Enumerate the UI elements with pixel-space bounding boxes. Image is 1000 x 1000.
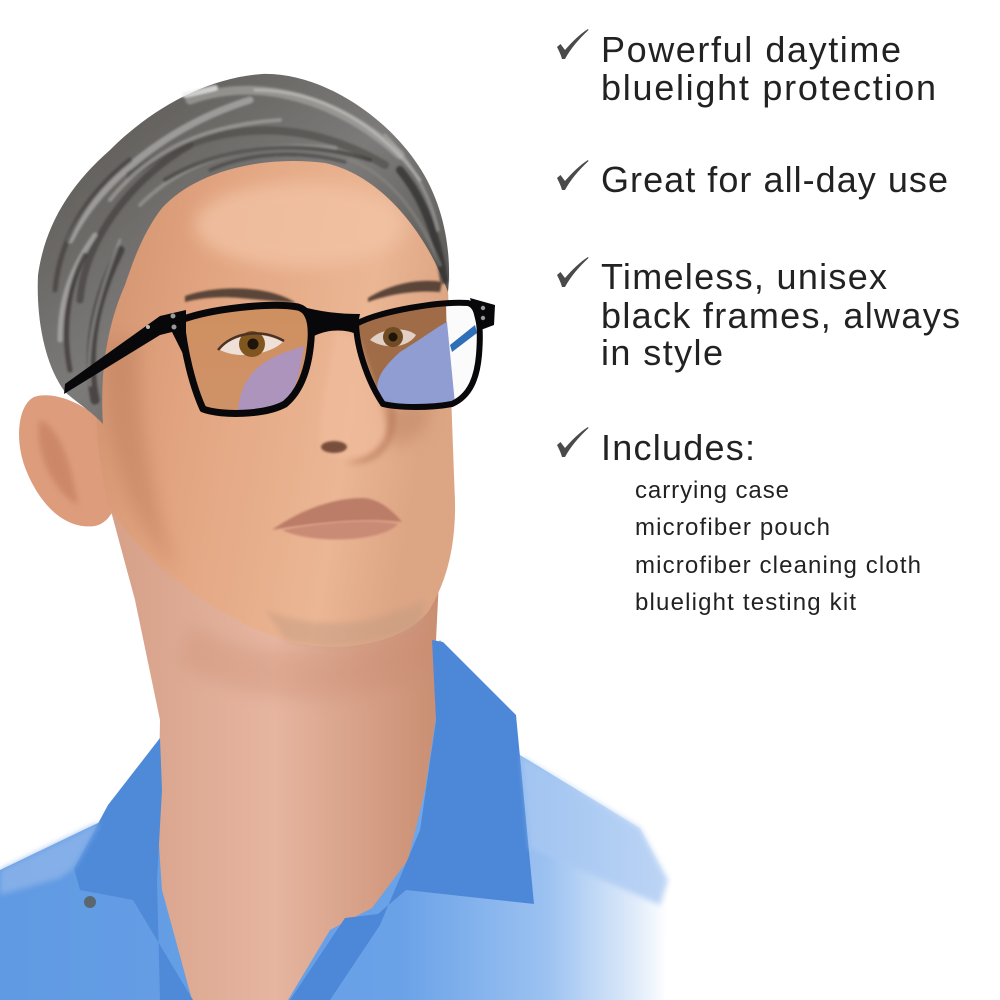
text: Powerful daytime <box>601 29 901 70</box>
neck <box>108 500 440 1000</box>
forehead highlight <box>195 183 405 267</box>
photo: man wearing black glasses <box>0 74 668 1000</box>
upper lip <box>272 498 402 530</box>
item: includes <box>557 427 921 616</box>
lens reflection right <box>377 322 455 407</box>
item: black frames <box>557 256 960 373</box>
shirt shoulder light <box>522 757 668 905</box>
text: Great for all-day use <box>601 159 948 200</box>
lower lip <box>282 521 398 539</box>
included items: microfiber cleaning cloth <box>635 552 921 579</box>
included items: carrying case <box>635 477 789 504</box>
glasses frame <box>181 303 480 413</box>
right eye <box>370 327 416 347</box>
nostril <box>321 441 347 453</box>
text: in style <box>601 332 723 373</box>
item: daytime protection <box>557 29 936 108</box>
heading: Includes: <box>601 427 755 468</box>
collar left <box>74 738 193 1000</box>
left eye <box>218 331 284 357</box>
hair <box>38 74 449 424</box>
neck shadow <box>180 625 436 699</box>
ear <box>19 395 121 526</box>
inner ear <box>39 420 78 505</box>
included items: microfiber pouch <box>635 514 830 541</box>
glasses hinges, bridge and temple <box>64 298 495 394</box>
head and face <box>96 124 455 647</box>
check icon <box>557 160 588 190</box>
included items: bluelight testing kit <box>635 589 856 616</box>
check icon <box>557 427 588 457</box>
text: Timeless, unisex <box>601 256 887 297</box>
check icon <box>557 29 588 59</box>
hair highlights <box>55 88 444 400</box>
check icon <box>557 257 588 287</box>
collar right <box>290 640 534 1000</box>
text: black frames, always <box>601 295 960 336</box>
nose side shadow <box>345 400 396 464</box>
text: bluelight protection <box>601 67 936 108</box>
left shoulder light <box>0 822 100 895</box>
nose shadow beside the bridge <box>358 345 430 450</box>
cheek side shadow <box>104 340 175 570</box>
jaw stubble shading <box>265 600 425 647</box>
left lens <box>181 305 311 413</box>
lens reflection left <box>238 346 304 411</box>
item: all-day use <box>557 159 948 200</box>
right lens skin tint <box>356 302 447 402</box>
shirt button <box>84 896 96 908</box>
eyebrows <box>185 281 442 303</box>
temple seen through right lens <box>450 325 477 352</box>
feature list <box>557 29 960 616</box>
right lens <box>356 303 480 407</box>
shirt body <box>0 640 668 1000</box>
nose <box>320 330 386 457</box>
